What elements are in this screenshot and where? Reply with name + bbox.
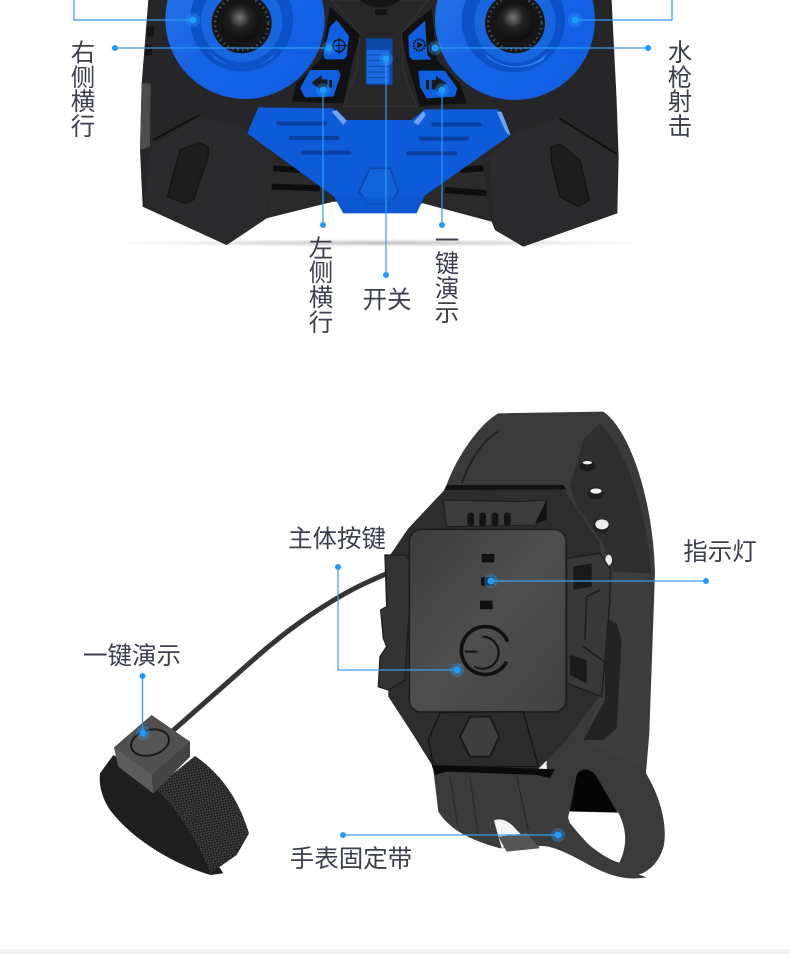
cable [168, 573, 388, 735]
power logo [461, 627, 508, 675]
top clasp [443, 500, 547, 527]
lower strap [433, 770, 647, 878]
watch photo [378, 412, 665, 878]
strap back band [447, 412, 665, 877]
power switch [366, 38, 393, 85]
callout: 一键演示 controller: 键 [435, 250, 459, 278]
callout: 右侧横行 [71, 0, 336, 141]
callout: 开关 [362, 52, 412, 314]
callout: 主体按键: 主体按键 [288, 525, 386, 553]
callout: 指示灯 [484, 538, 757, 588]
left wheel [165, 0, 325, 99]
grip slots [167, 143, 208, 203]
blue front plate [247, 107, 511, 213]
callout: 主体按键 [288, 525, 464, 677]
button housing [114, 715, 190, 793]
callout: 水枪射击: 射 [668, 88, 692, 116]
finger strap with button [100, 715, 249, 875]
callout: 左侧横行: 左 [309, 235, 333, 263]
indicator slots [480, 554, 494, 609]
callout: 水枪射击: 水 [668, 39, 692, 67]
callout: 水枪射击: 枪 [668, 64, 692, 92]
right wheel [435, 0, 595, 100]
callout: 左侧横行: 横 [309, 284, 333, 312]
watch face [409, 529, 566, 712]
top right button [408, 21, 432, 60]
callout: 右侧横行: 横 [71, 88, 95, 116]
velcro loop inner [100, 755, 223, 875]
strap holes [579, 461, 612, 565]
callout: 一键演示 controller: 示 [435, 300, 459, 327]
center console [332, 0, 428, 107]
callout: 手表固定带 [290, 828, 565, 873]
callout: 左侧横行 [309, 83, 333, 337]
callout: 开关: 开关 [362, 286, 412, 314]
top left button [323, 20, 349, 59]
controller shadow [110, 239, 650, 247]
callout: 一键演示 watch [83, 642, 181, 740]
strap loop opening [570, 770, 617, 813]
callout: 一键演示 watch: 一键演示 [83, 642, 181, 670]
controller photo [140, 0, 619, 247]
lower right button [418, 71, 457, 98]
callout: 一键演示 controller: 演 [435, 275, 459, 303]
callout: 右侧横行: 行 [71, 113, 95, 141]
grille [268, 157, 490, 218]
callout: 左侧横行: 侧 [309, 259, 333, 287]
callout: 右侧横行: 右 [71, 39, 95, 67]
controller body [140, 0, 619, 247]
callout: 一键演示 controller: 一 [435, 228, 459, 255]
callout: 指示灯: 指示灯 [683, 538, 757, 566]
lower left button [300, 70, 341, 97]
bottom bolt housing [428, 712, 555, 778]
callout: 水枪射击: 击 [668, 113, 692, 141]
watch body [387, 487, 605, 771]
callout: 水枪射击 [428, 0, 692, 141]
callout: 右侧横行: 侧 [71, 64, 95, 92]
bottom band [0, 949, 790, 954]
callout: 一键演示 controller [435, 83, 459, 327]
callout: 手表固定带: 手表固定带 [290, 845, 412, 873]
velcro mesh [155, 756, 249, 873]
side clips [378, 555, 412, 690]
callout: 左侧横行: 行 [309, 309, 333, 337]
